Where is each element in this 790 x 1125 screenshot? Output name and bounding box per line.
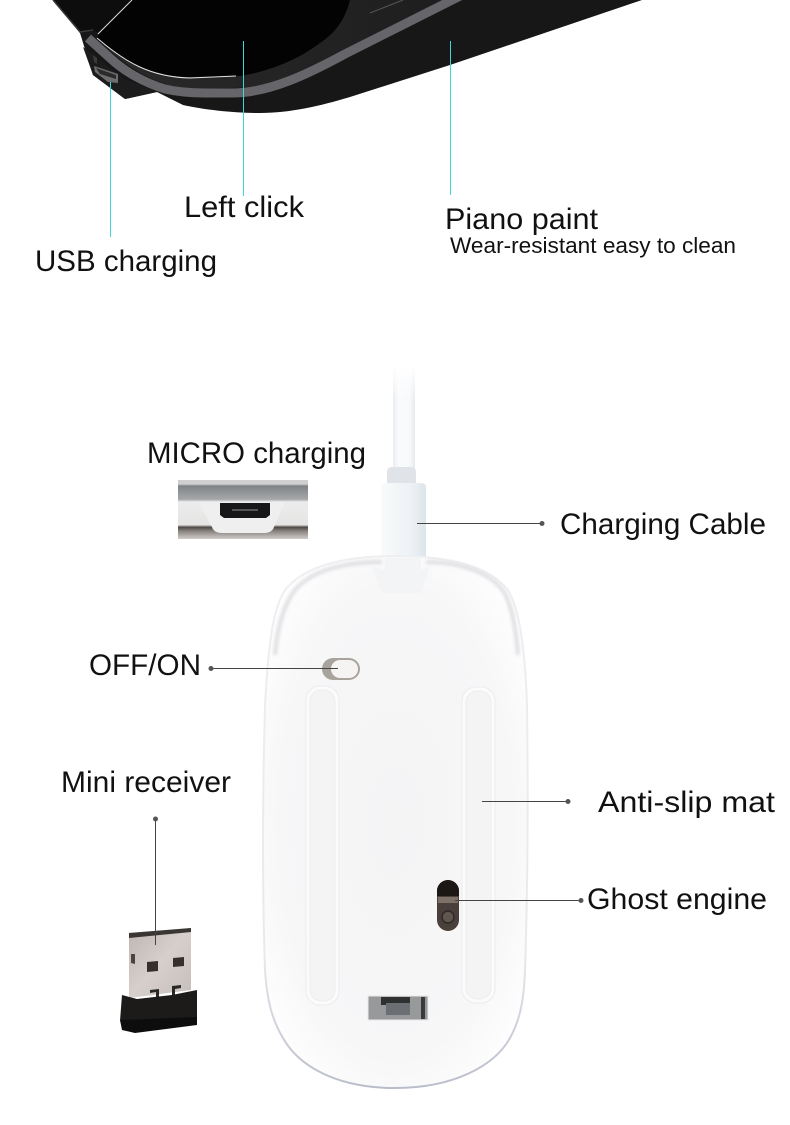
left anti-slip pad	[306, 686, 339, 1005]
label: OFF/ON: OFF/ON	[89, 649, 201, 682]
ghost engine slot	[437, 880, 459, 931]
label: Piano paint: Piano paint	[445, 203, 599, 236]
charging cable	[381, 365, 426, 557]
sensor window	[368, 996, 428, 1020]
label: Charging Cable: Charging Cable	[560, 508, 766, 541]
label: Left click: Left click	[184, 191, 305, 224]
white mouse underside	[263, 556, 528, 1088]
label: Mini receiver: Mini receiver	[61, 766, 231, 799]
photo: micro USB port	[178, 480, 308, 539]
charging port notch	[372, 558, 430, 593]
text: Wear-resistant easy to clean: Wear-resistant easy to clean	[450, 233, 736, 258]
pointer: ghost engine	[455, 898, 584, 903]
label: Anti-slip mat: Anti-slip mat	[598, 786, 776, 819]
pointer: USB charging	[110, 82, 112, 237]
USB mini receiver	[120, 928, 197, 1033]
pointer: off/on switch	[208, 666, 338, 671]
right anti-slip pad	[462, 687, 495, 1003]
label: USB charging: USB charging	[35, 245, 217, 278]
pointer: anti-slip mat	[482, 799, 570, 804]
label: Ghost engine: Ghost engine	[587, 883, 767, 916]
mouse body	[263, 556, 528, 1088]
power switch	[322, 658, 360, 680]
top rim highlight	[275, 562, 382, 655]
pointer: left click	[242, 41, 244, 196]
black mouse front view	[53, 0, 642, 113]
pointer: piano paint	[450, 41, 452, 195]
pointer: charging cable	[417, 521, 544, 526]
pointer: mini receiver	[153, 816, 158, 945]
label: MICRO charging: MICRO charging	[147, 437, 366, 470]
